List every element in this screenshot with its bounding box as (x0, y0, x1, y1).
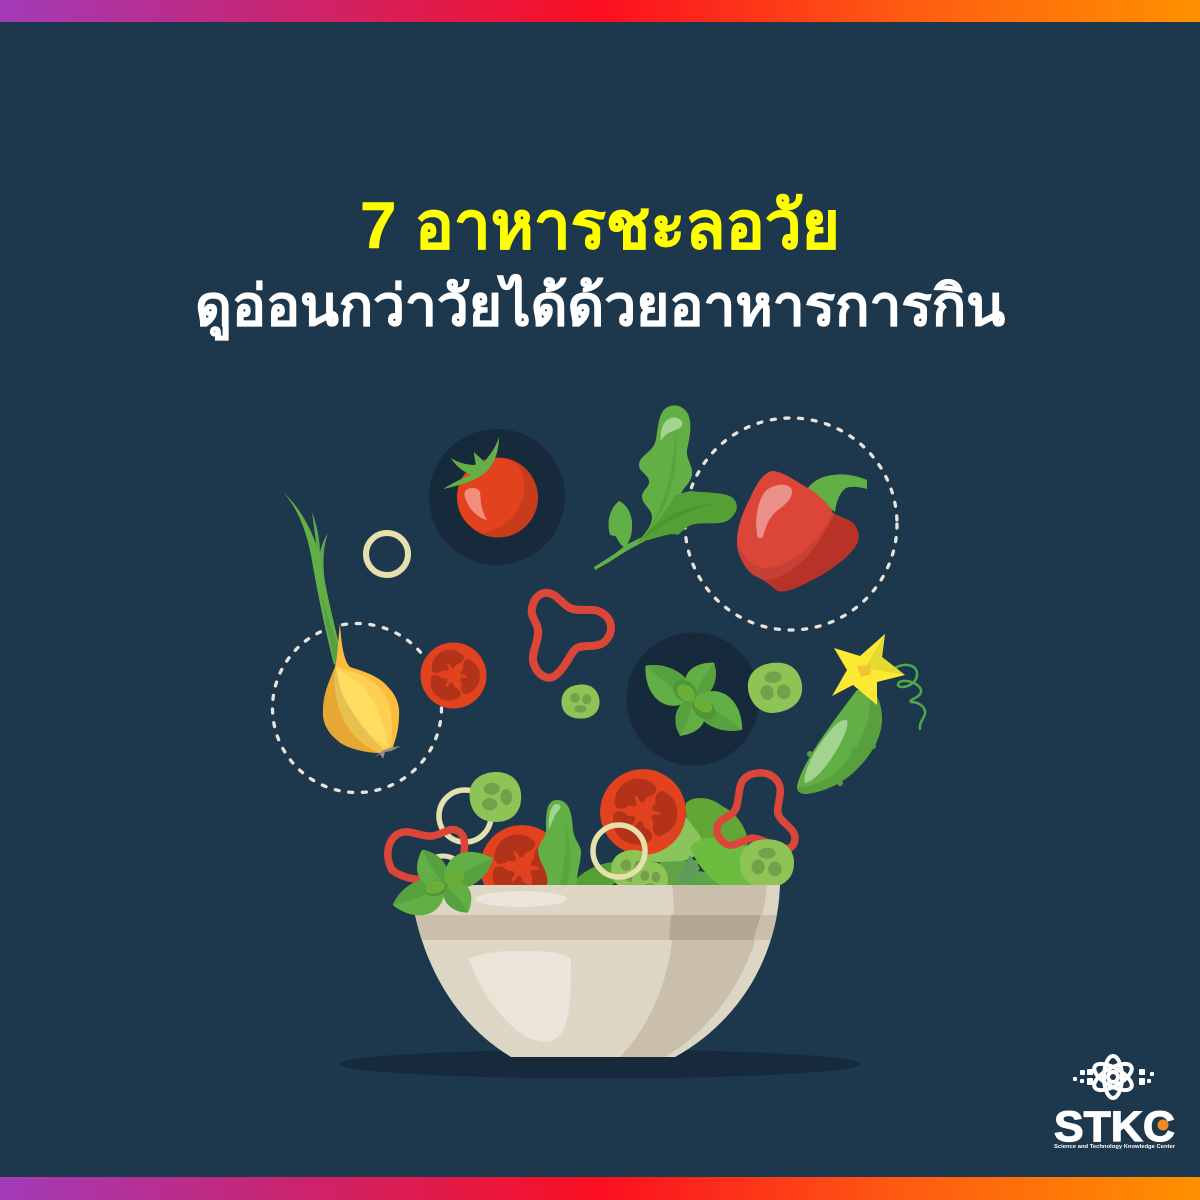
logo icon: atom (1090, 1056, 1136, 1098)
icon: onion ring (366, 533, 408, 575)
icon: cucumber slice right (740, 839, 794, 888)
icon: arugula leaf (594, 405, 737, 570)
icon: tomato (443, 437, 538, 538)
icon: lower onion ring (436, 854, 455, 860)
icon: basil on bowl rim (388, 840, 499, 925)
icon: onion ring front (593, 825, 645, 877)
logo dots (1073, 1069, 1154, 1085)
icon: cucumber flower (832, 634, 905, 705)
bowl rim highlight (475, 891, 567, 907)
icon: left pepper ring (388, 829, 465, 880)
icon: cucumber pieces (611, 850, 668, 885)
icon: small cucumber slice (562, 684, 600, 719)
icon: light lettuce (648, 816, 702, 862)
icon: arugula in bowl (538, 800, 581, 885)
icon: dark lettuce (686, 798, 748, 846)
icon: bright lettuce (690, 838, 753, 885)
dark circle behind tomato (429, 429, 565, 565)
dark circle behind basil (626, 632, 760, 766)
icon: small greens (660, 855, 720, 885)
shadow under bowl (340, 1050, 860, 1078)
icon: cucumber slice (744, 659, 806, 717)
logo orange dot (1158, 1120, 1168, 1130)
icon: bell pepper (737, 471, 867, 591)
icon: ring behind cucumber (439, 790, 491, 842)
icon: cucumber tendril (895, 665, 925, 730)
logo: STKC (1054, 1056, 1176, 1151)
icon: onion bulb (323, 623, 401, 759)
bowl shaded side (400, 885, 790, 1057)
icon: right pepper ring (717, 773, 795, 848)
title (195, 188, 1005, 341)
salad in bowl (384, 769, 799, 885)
dashed circle around onion (272, 624, 442, 792)
icon: cucumber (797, 690, 882, 794)
logo tagline: Science and Technology Knowledge Center (1054, 1144, 1176, 1150)
icon: tomato slice (420, 642, 486, 708)
icon: tomato slice left (482, 825, 548, 885)
bowl body (410, 885, 780, 1057)
dashed circle around pepper (685, 418, 897, 630)
icon: back leaf (576, 862, 616, 885)
icon: basil (633, 654, 753, 742)
bottom gradient bar (0, 1177, 1200, 1200)
subheading: white line: ดูอ่อนกว่าวัยได้ด้วยอาหารการกิน (195, 273, 1005, 341)
bowl body highlight (469, 951, 571, 1042)
icon: cucumber slice top left (470, 772, 521, 822)
logo wordmark: STKC (1054, 1103, 1175, 1151)
top gradient bar (0, 0, 1200, 22)
heading: yellow line: 7 อาหารชะลอวัย (360, 188, 840, 262)
icon: bowl (400, 885, 790, 1057)
icon: spring onion (283, 492, 340, 668)
icon: tomato slice large (600, 769, 686, 855)
icon: pepper ring (532, 593, 611, 678)
